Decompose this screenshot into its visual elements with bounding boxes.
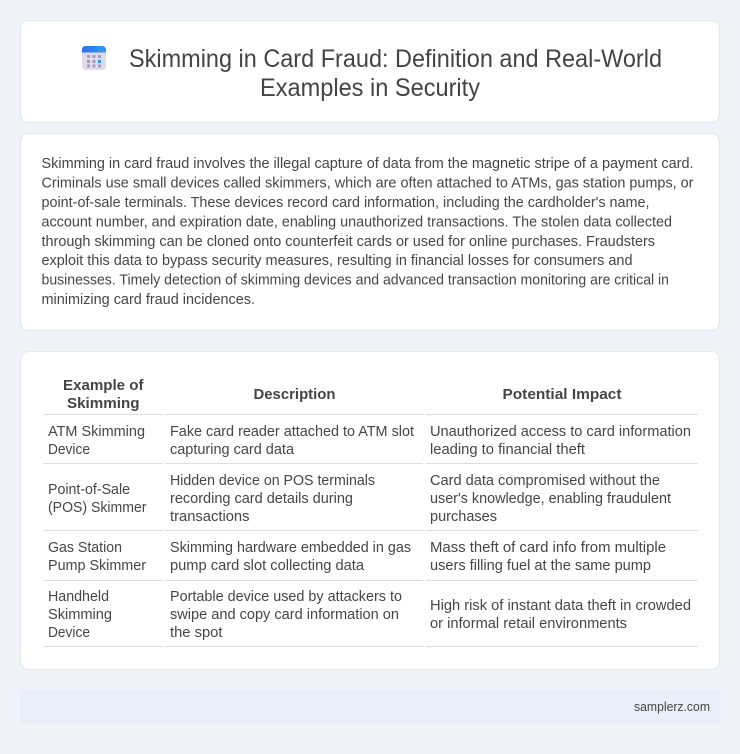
table row: point-of-sale skimmer: Card data compromised without the xyxy=(430,473,660,489)
panel: examples table xyxy=(20,352,720,670)
table row: handheld skimming device: Portable device used by attackers to xyxy=(170,589,402,605)
table row: ATM skimming device: leading to financial theft xyxy=(430,442,585,458)
title: Skimming in Card Fraud: Definition and Real-World xyxy=(129,45,662,73)
table row: gas station pump skimmer: Mass theft of card info from multiple xyxy=(430,540,666,556)
table row: gas station pump skimmer: Skimming hardware embedded in gas xyxy=(170,540,411,556)
table header xyxy=(63,377,622,412)
table row: gas station pump skimmer: Pump Skimmer xyxy=(48,558,146,574)
table row: handheld skimming device: High risk of instant data theft in crowded xyxy=(430,598,691,614)
table row: point-of-sale skimmer: (POS) Skimmer xyxy=(48,500,147,516)
table row: ATM skimming device: Device xyxy=(48,442,90,458)
table row: ATM skimming device: ATM Skimming xyxy=(48,424,145,440)
title: Examples in Security xyxy=(260,74,480,102)
text block: definition: account number, and expiration date, enabling unauthorized transactions. The stolen data collected xyxy=(42,214,672,230)
text block: definition xyxy=(42,156,694,308)
table row: gas station pump skimmer: pump card slot collecting data xyxy=(170,558,364,574)
panel: title card xyxy=(20,20,720,122)
table row: gas station pump skimmer xyxy=(48,540,666,574)
text block: definition: Criminals use small devices called skimmers, which are often attached to ATMs, gas station pumps, or xyxy=(42,175,694,191)
table row: gas station pump skimmer: users filling fuel at the same pump xyxy=(430,558,651,574)
table row: ATM skimming device: Fake card reader attached to ATM slot xyxy=(170,424,414,440)
table row: handheld skimming device: the spot xyxy=(170,625,222,641)
table row: handheld skimming device: Skimming xyxy=(48,607,112,623)
table row: handheld skimming device xyxy=(48,589,691,641)
text block: definition: Skimming in card fraud involves the illegal capture of data from the magnetic stripe of a payment card. xyxy=(42,156,694,172)
table row: handheld skimming device: Handheld xyxy=(48,589,109,605)
table row: ATM skimming device: Unauthorized access to card information xyxy=(430,424,691,440)
table row: point-of-sale skimmer: recording card details during xyxy=(170,491,353,507)
table header: Example of xyxy=(63,377,144,394)
table row: ATM skimming device: capturing card data xyxy=(170,442,294,458)
text block: definition: exploit this data to bypass security measures, resulting in financial losses for consumers and xyxy=(42,253,632,269)
table row: handheld skimming device: Device xyxy=(48,625,90,641)
text block: definition: through skimming can be cloned onto counterfeit cards or used for online purchases. Fraudsters xyxy=(42,234,655,250)
table row: gas station pump skimmer: Gas Station xyxy=(48,540,122,556)
text block: definition: point-of-sale terminals. These devices record card information, including the cardholder's name, xyxy=(42,195,650,211)
table row: point-of-sale skimmer: user's knowledge, enabling fraudulent xyxy=(430,491,671,507)
table header: Description xyxy=(254,386,336,403)
text block: definition: businesses. Timely detection of skimming devices and advanced transaction monitoring are critical in xyxy=(42,273,669,289)
table header: Potential Impact xyxy=(502,386,622,403)
table header: Skimming xyxy=(67,395,140,412)
footer: samplerz.com xyxy=(634,700,710,714)
table row: point-of-sale skimmer xyxy=(48,473,671,525)
table row: point-of-sale skimmer: transactions xyxy=(170,509,250,525)
table row: point-of-sale skimmer: Point-of-Sale xyxy=(48,482,130,498)
table row: handheld skimming device: swipe and copy card information on xyxy=(170,607,399,623)
table row: point-of-sale skimmer: Hidden device on POS terminals xyxy=(170,473,375,489)
table row: handheld skimming device: or informal retail environments xyxy=(430,616,627,632)
table row: point-of-sale skimmer: purchases xyxy=(430,509,497,525)
text block: definition: minimizing card fraud incidences. xyxy=(42,292,255,308)
table row: ATM skimming device xyxy=(48,424,691,458)
panel: definition paragraph xyxy=(20,134,720,330)
footer xyxy=(20,690,720,724)
icon: calendar xyxy=(82,46,106,70)
title xyxy=(129,45,662,102)
